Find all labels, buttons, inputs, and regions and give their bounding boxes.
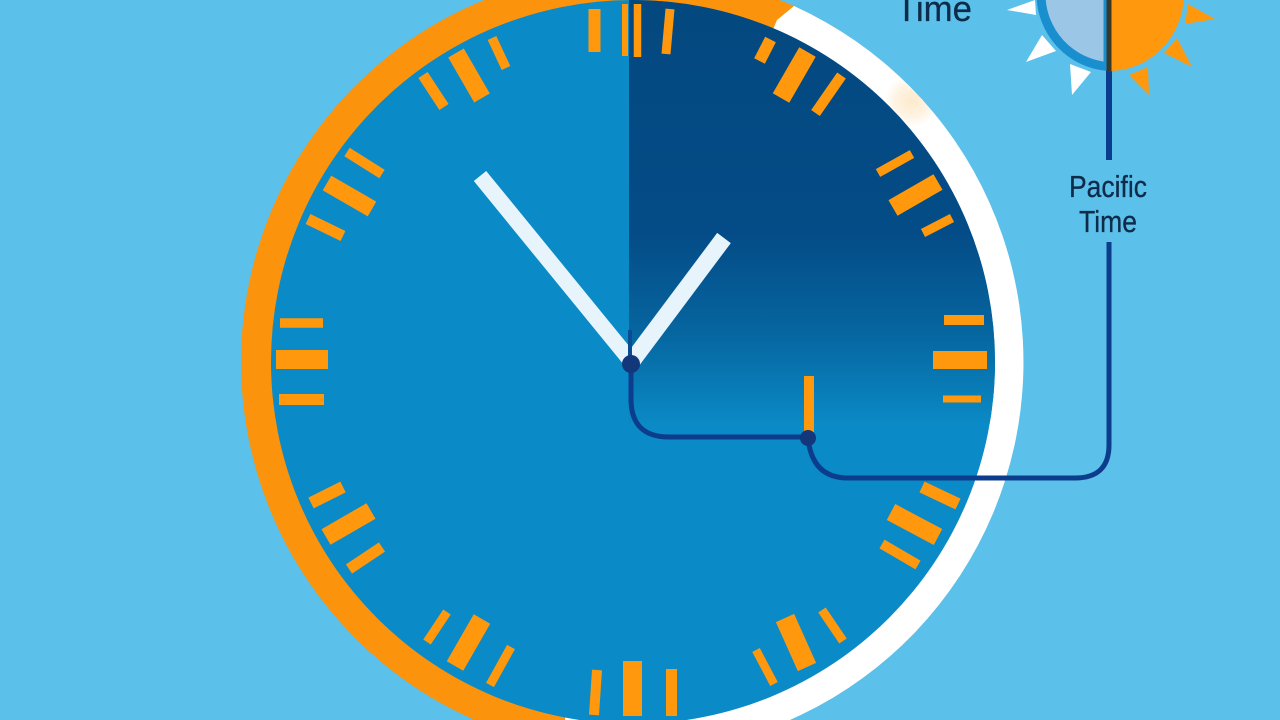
sun left half (1041, 0, 1108, 66)
sun right half (1108, 0, 1184, 71)
ticks: 5 o'clock (756, 610, 843, 684)
sun divider (1106, 0, 1112, 71)
ticks: 8 o'clock (311, 487, 382, 569)
clock centre hub (622, 355, 640, 373)
sun rays: white side (1007, 0, 1091, 95)
clock ring: orange segment (241, 0, 1023, 720)
connector line from marker to sun (808, 242, 1109, 478)
ticks: 10 o'clock (308, 152, 382, 236)
ticks: 9 o'clock (276, 323, 328, 400)
ticks: 11 o'clock (423, 38, 506, 107)
clock face (271, 0, 995, 720)
label: Pacific Time: Time (1079, 204, 1137, 239)
label: Pacific Time (1069, 169, 1147, 239)
infographic canvas (241, 0, 1215, 720)
minute hand (480, 176, 631, 361)
icon: half sun (1007, 0, 1215, 95)
connector line from clock centre to marker (631, 363, 808, 437)
orange marker tick (804, 376, 814, 432)
label: Pacific Time: Pacific (1069, 169, 1147, 204)
ticks: 7 o'clock (427, 612, 511, 685)
hour hand (632, 238, 724, 361)
ticks: 12 o'clock (594, 4, 670, 57)
connector line below sun (1106, 60, 1112, 160)
sun rays: orange side (1129, 4, 1215, 95)
clock ring: white segment (560, 6, 1023, 720)
marker dot (800, 430, 816, 446)
clock ring: pale highlight (887, 80, 933, 124)
shaded quadrant of clock face (629, 0, 999, 425)
centre vertical marker line (628, 330, 632, 363)
ticks: 2 o'clock (878, 154, 952, 233)
clock (241, 0, 1023, 720)
ticks: 6 o'clock (594, 661, 672, 716)
ticks: 4 o'clock (882, 487, 958, 565)
hour tick marks (276, 4, 987, 716)
ticks: 1 o'clock (760, 40, 842, 113)
ticks: 3 o'clock (933, 320, 987, 399)
